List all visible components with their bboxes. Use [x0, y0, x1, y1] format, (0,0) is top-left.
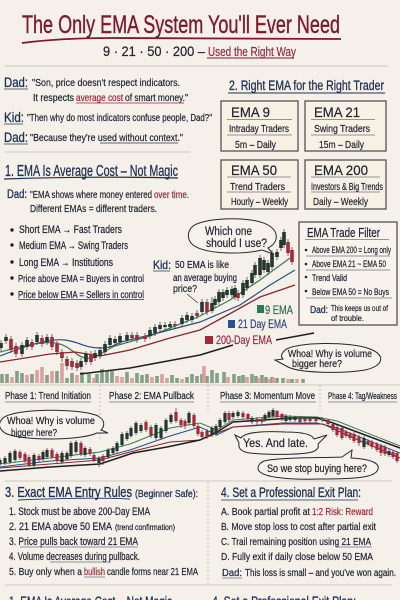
exit list: A. Book partial profit at	[221, 506, 310, 518]
kid question: 50 EMA is like	[175, 260, 229, 271]
green candles	[1, 232, 284, 367]
card: EMA 50	[221, 160, 298, 209]
legend: 21 day EMA: 21 Day EMA	[238, 317, 287, 331]
card: EMA 200: Daily – Weekly	[313, 196, 369, 208]
panel: EMA trade filter: EMA Trade Filter	[307, 226, 380, 240]
rules list	[9, 506, 198, 578]
bullet list: Long EMA → Institutions	[19, 257, 113, 269]
dialogue: dad and kid: "Then why do most indicators confuse people, Dad?"	[27, 112, 212, 124]
phase candlestick chart	[0, 408, 400, 471]
dad explanation: Different EMAs = different traders.	[30, 203, 157, 215]
legend: 9 EMA	[257, 303, 293, 317]
speech bubble: whoa phase chart	[0, 410, 108, 439]
rules list: 4. Volume decreases during pullback.	[9, 551, 140, 563]
dad explanation	[7, 189, 189, 215]
legend: 21 day EMA	[228, 317, 287, 331]
panel: EMA trade filter: of trouble.	[331, 313, 364, 323]
speech bubble: which one: Which one	[205, 226, 252, 238]
speech bubble: stop buying	[258, 450, 378, 479]
volume bars	[2, 363, 303, 383]
speech bubble: yes and late	[235, 432, 327, 454]
panel: EMA trade filter	[299, 222, 397, 325]
panel: EMA is average cost	[4, 163, 189, 301]
speech bubble: yes and late: Yes. And late.	[243, 436, 308, 450]
speech bubble: whoa phase chart: Whoa! Why is volume	[7, 415, 95, 427]
dad explanation: "EMA shows where money entered	[30, 190, 152, 201]
phase labels	[5, 391, 397, 402]
panel: EMA trade filter: Trend Valid	[312, 273, 347, 283]
kid question: Kid:	[153, 258, 171, 272]
dialogue: dad and kid: of smart money."	[125, 92, 188, 104]
dialogue: dad and kid: Dad:	[4, 129, 28, 145]
bullet list: Price below EMA = Sellers in control	[18, 289, 144, 301]
dad explanation: Dad:	[7, 189, 27, 201]
legend: 200 day EMA: 200-Day EMA	[216, 333, 272, 347]
card: EMA 9: EMA 9	[231, 104, 270, 120]
phase labels: Phase 2: EMA Pullback	[109, 391, 195, 402]
dialogue: dad and kid	[4, 74, 212, 145]
subtitle: Used the Right Way	[208, 44, 296, 59]
subtitle	[103, 43, 296, 59]
dialogue: dad and kid: It respects	[33, 92, 74, 104]
exit list: 1:2 Risk: Reward	[312, 506, 373, 518]
exit list: Dad:	[222, 567, 242, 579]
EMA lines	[0, 258, 314, 374]
panel: EMA trade filter: Dad:	[310, 304, 328, 316]
section heading 1: 1. EMA Is Average Cost – Not Magic	[5, 163, 178, 180]
speech bubble: which one: should I use?	[206, 238, 267, 250]
card: EMA 9	[221, 101, 298, 151]
dad explanation: over time.	[154, 190, 189, 201]
speech bubble: whoa phase chart: bigger here?	[11, 427, 57, 439]
card: EMA 200: EMA 200	[314, 162, 368, 178]
phase EMA lines	[0, 416, 400, 471]
dialogue: dad and kid: average cost	[76, 92, 123, 104]
panel: entry rules	[5, 485, 198, 578]
legend: 200 day EMA	[205, 333, 272, 347]
card: EMA 50: EMA 50	[231, 162, 277, 178]
speech bubble: stop buying: So we stop buying here?	[267, 463, 367, 475]
speech bubble: volume: Whoa! Why is volume	[288, 348, 372, 360]
kid question: price?	[173, 284, 197, 295]
red candles	[11, 242, 292, 368]
speech bubble: volume	[275, 343, 381, 372]
rules list: candle forms near 21 EMA	[107, 566, 198, 578]
exit list	[221, 506, 396, 579]
card: EMA 9: Intraday Traders	[229, 123, 289, 135]
rules list: (trend confirmation)	[115, 522, 175, 532]
panel: exit plan	[221, 484, 396, 579]
phase green candles	[0, 410, 389, 465]
rules list: 3. Price pulls back toward 21 EMA	[9, 536, 139, 548]
card: EMA 21	[305, 101, 386, 151]
card: EMA 21: 15m – Daily	[319, 139, 365, 151]
bullet list: Medium EMA → Swing Traders	[19, 240, 128, 252]
card: EMA 21: Swing Traders	[314, 123, 370, 135]
subtitle: 9 · 21 · 50 · 200 –	[103, 43, 205, 59]
phase red candles	[20, 411, 397, 465]
kid question	[153, 258, 237, 303]
speech bubble: which one	[188, 219, 276, 254]
bullet list	[10, 224, 144, 301]
card: EMA 50: Trend Traders	[230, 181, 285, 193]
rules list: 1. Stock must be above 200-Day EMA	[9, 506, 150, 518]
rules list: bullish	[84, 566, 105, 578]
bullet list: Short EMA → Fast Traders	[19, 224, 122, 236]
panel: right EMA for the right trader	[221, 78, 386, 209]
kid question: an average buying	[173, 273, 237, 284]
card: EMA 9: 5m – Daily	[235, 139, 277, 151]
dialogue: dad and kid: "Because they're used without context."	[30, 132, 183, 144]
rules list: 2. 21 EMA above 50 EMA	[9, 521, 113, 533]
card: EMA 50: Hourly – Weekly	[231, 196, 289, 208]
candlestick chart with EMAs	[0, 229, 314, 383]
speech bubble: volume: bigger here?	[292, 358, 342, 370]
candle wicks	[1, 229, 292, 371]
card: EMA 21: EMA 21	[314, 104, 360, 120]
card: EMA 200	[305, 160, 386, 209]
phase labels: Phase 3: Momentum Move	[220, 391, 315, 402]
phase candle wicks	[0, 408, 397, 467]
dialogue: dad and kid: Dad:	[4, 74, 28, 90]
dialogue: dad and kid: Kid:	[4, 109, 24, 125]
section heading 3: 3. Exact EMA Entry Rules	[5, 485, 132, 501]
bullet list: Price above EMA = Buyers in control	[18, 273, 144, 285]
section heading 3: (Beginner Safe):	[135, 488, 198, 500]
legend: 9 EMA: 9 EMA	[265, 303, 293, 317]
dialogue: dad and kid: "Son, price doesn't respect indicators.	[32, 77, 180, 89]
rules list: 5. Buy only when a	[9, 566, 82, 578]
phase labels: Phase 1: Trend Initiation	[5, 391, 91, 402]
